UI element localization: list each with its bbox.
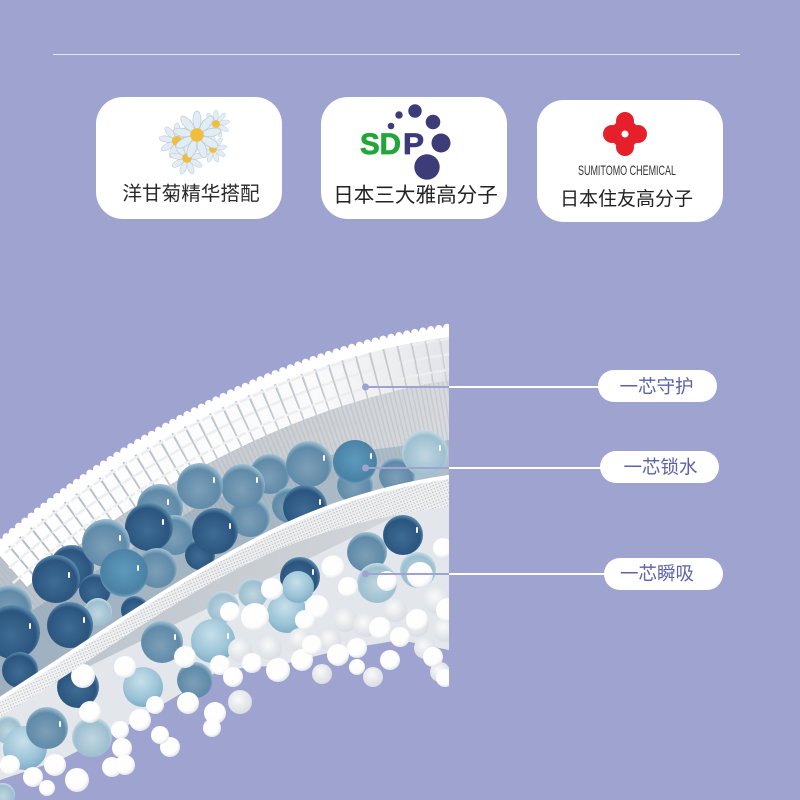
absorbent beads upper layer [0,430,448,688]
card label: Sumitomo: 日本住友高分子 [560,188,693,210]
callout: instant absorb [449,558,723,590]
panel: chamomile essence card [96,97,282,219]
callout markers inside image [362,384,449,578]
panel: Sumitomo card [537,100,723,222]
icon: chamomile flowers [159,110,230,175]
callout: lock water: 一芯锁水 [623,456,698,478]
callout: protect: 一芯守护 [619,376,694,397]
icon: SDP logo: P [403,128,424,161]
middle mesh sheet [0,475,449,717]
absorbent beads lower layer [0,515,436,770]
callout: protect [449,370,717,402]
icon: SDP logo: SD [360,128,401,161]
illustration: absorbent core cross-section [0,327,462,800]
top fabric layer [0,327,462,710]
callout: instant absorb: 一芯瞬吸 [620,563,694,584]
logo wordmark: SUMITOMO CHEMICAL [578,162,676,178]
card label: SDP: 日本三大雅高分子 [333,184,498,207]
shadow behind upper beads [0,440,449,700]
panel: SDP card [321,97,507,219]
icon: SDP logo [360,104,450,180]
callout: lock water [449,451,719,483]
icon: Sumitomo logo [603,112,647,156]
top divider line [53,54,740,55]
bead specular highlights [30,446,440,726]
lower layer backing [0,490,449,780]
card label: chamomile: 洋甘菊精华搭配 [122,183,260,205]
foam particles [0,538,460,800]
